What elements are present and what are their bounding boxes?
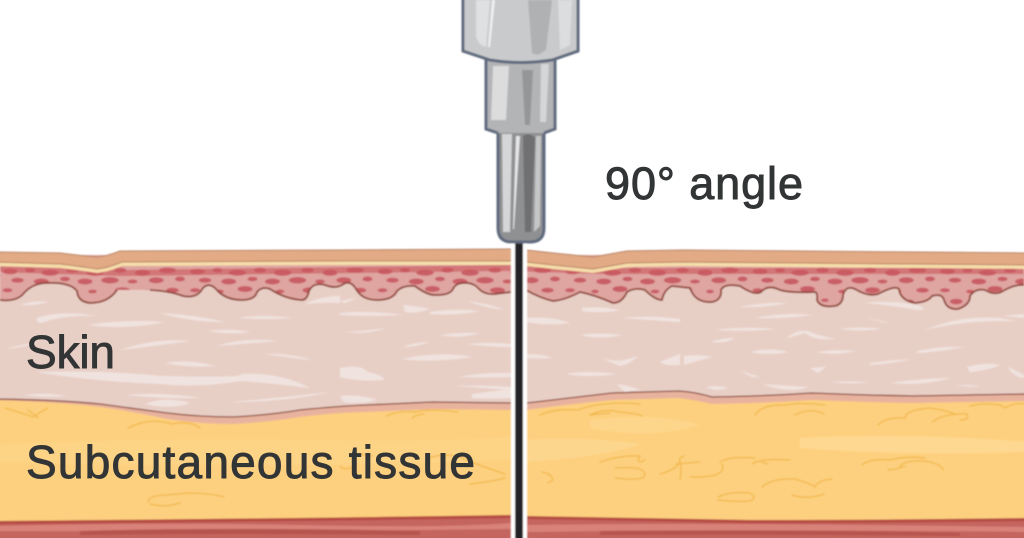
white gap around needle	[511, 243, 527, 538]
hub top section	[463, 0, 578, 62]
fat cell outlines	[5, 403, 1024, 506]
label: Subcutaneous tissue: Subcutaneous tissue	[26, 436, 475, 488]
needle shaft	[515, 240, 523, 538]
epidermis tan layer	[0, 249, 1024, 269]
label: Skin: Skin	[26, 326, 115, 378]
muscle layer	[0, 512, 1024, 538]
hub middle section	[486, 58, 555, 133]
papillary red layer	[0, 254, 1024, 311]
dermis layer	[0, 275, 1024, 417]
dermis fibres	[5, 296, 1024, 407]
label: 90° angle: 90° angle	[605, 158, 803, 209]
connective band under dermis	[0, 380, 1024, 424]
hub tip section	[498, 130, 544, 242]
epidermis cream band	[0, 261, 1024, 273]
fat layer: subcutaneous tissue	[0, 390, 1024, 521]
labels	[26, 158, 803, 488]
needle hub	[463, 0, 578, 242]
